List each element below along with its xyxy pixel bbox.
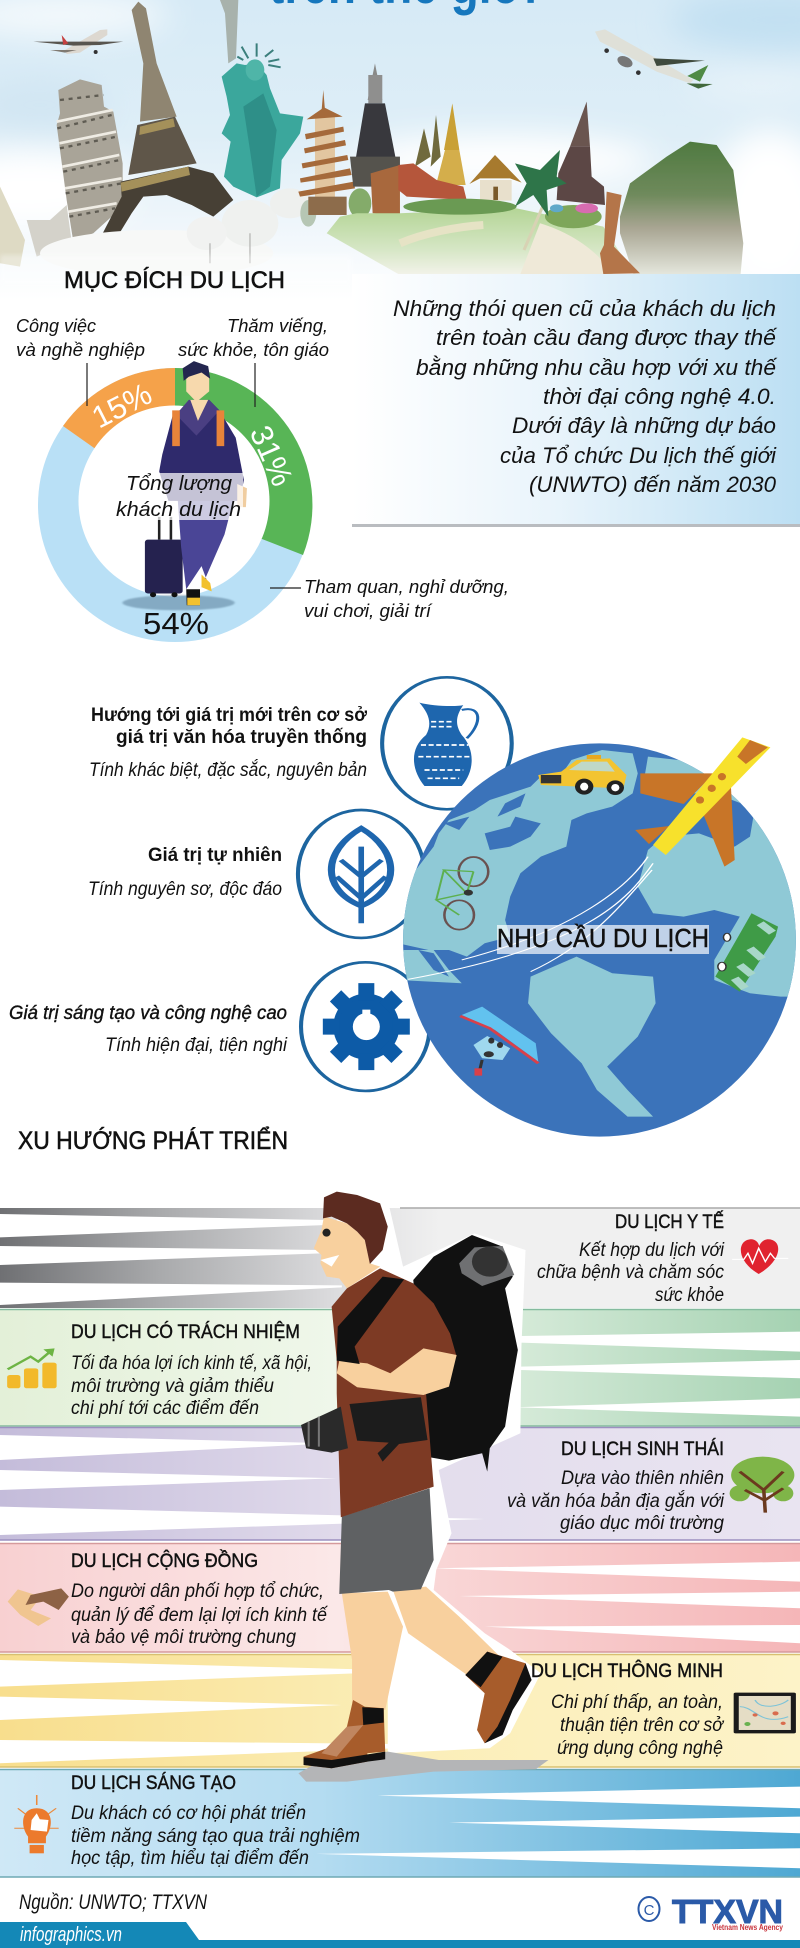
legs (342, 1587, 500, 1710)
island ground (327, 208, 633, 275)
trend: smart tourism (531, 1659, 725, 1759)
donut chart: travel purposes (16, 315, 509, 642)
trend: smart tourism: DU LỊCH THÔNG MINH (531, 1659, 723, 1682)
trend: medical tourism (537, 1210, 725, 1306)
landmark: pagoda (298, 90, 355, 215)
icon: coins and arrow (7, 1348, 57, 1388)
landmark: Statue of Liberty (220, 0, 303, 197)
value: 31%: 31% (243, 420, 300, 491)
text: traditional culture (89, 704, 367, 781)
label: sightseeing (304, 576, 509, 621)
text: natural value: Tính nguyên sơ, độc đáo (88, 878, 282, 900)
landmark: golden stupa (398, 103, 467, 200)
value: 15%: 15% (86, 376, 157, 435)
airplane right (595, 29, 713, 89)
trend: creative tourism: Du khách có cơ hội phát triển (71, 1802, 306, 1824)
label: visits: Thăm viếng, (227, 315, 328, 336)
icon: tree (730, 1457, 794, 1513)
centre label: Tổng lượng (126, 473, 232, 495)
bushes and flowers (403, 199, 602, 228)
label: sightseeing: Tham quan, nghỉ dưỡng, (304, 576, 509, 597)
front boot (304, 1700, 385, 1768)
heading: development trends: XU HƯỚNG PHÁT TRIỂN (18, 1126, 288, 1155)
trend: smart tourism: thuận tiện trên cơ sở (560, 1714, 725, 1736)
panel: intro text: bằng những nhu cầu hợp với xu thế (416, 355, 777, 380)
panel: intro text: của Tổ chức Du lịch thế giới (500, 443, 777, 468)
hero: sky and world landmarks (0, 0, 800, 300)
landmark: old town left (0, 187, 72, 267)
label: work: và nghề nghiệp (16, 339, 145, 360)
trend: responsible tourism: chi phí tới các điểm đến (71, 1397, 259, 1419)
palm tree (515, 150, 567, 250)
limestone island (620, 142, 743, 274)
icon: map tablet (734, 1693, 796, 1733)
shirt (332, 1268, 457, 1517)
text: traditional culture: Hướng tới giá trị mới trên cơ sở (91, 704, 367, 726)
trend: creative tourism: tiềm năng sáng tạo qua trải nghiệm (71, 1825, 360, 1847)
centre label (116, 473, 243, 521)
trend: responsible tourism (71, 1320, 312, 1419)
panel: intro text: thời đại công nghệ 4.0. (543, 384, 776, 409)
text: creativity value: Tính hiện đại, tiện nghi (105, 1034, 288, 1056)
text: traditional culture: giá trị văn hóa truyền thống (116, 726, 367, 748)
strap (337, 1277, 404, 1364)
sleeping roll (459, 1246, 514, 1286)
trend: eco-tourism: Dựa vào thiên nhiên (561, 1467, 724, 1489)
icon: heart (732, 1239, 788, 1274)
logo: TTXVN: C (644, 1902, 655, 1919)
logo: TTXVN: Vietnam News Agency (712, 1923, 783, 1932)
long-tail boat (600, 192, 640, 274)
label: work: Công việc (16, 315, 97, 336)
arm (337, 1348, 457, 1395)
landmark: small stupas (415, 115, 441, 167)
trend: eco-tourism: DU LỊCH SINH THÁI (561, 1437, 724, 1460)
trend: community tourism (71, 1548, 328, 1648)
landmark: leaning tower (57, 79, 123, 242)
text: natural value (88, 844, 282, 900)
trend: medical tourism: DU LỊCH Y TẾ (615, 1210, 724, 1233)
trend: smart tourism: Chi phí thấp, an toàn, (551, 1691, 723, 1713)
panel: intro text: Dưới đây là những dự báo (512, 413, 776, 438)
trend: community tourism: và bảo vệ môi trường chung (71, 1626, 296, 1648)
text: natural value: Giá trị tự nhiên (148, 844, 282, 866)
striped bands (0, 1208, 800, 1877)
vehicle: taxi (538, 755, 627, 795)
trend: eco-tourism (507, 1437, 725, 1534)
white halo (337, 1190, 541, 1753)
label: visits: sức khỏe, tôn giáo (178, 339, 329, 360)
trend: responsible tourism: Tối đa hóa lợi ích kinh tế, xã hội, (71, 1352, 312, 1374)
label: work (16, 315, 145, 360)
trend: responsible tourism: DU LỊCH CÓ TRÁCH NHIỆM (71, 1320, 300, 1343)
vehicle: bicycle (436, 857, 488, 930)
trend: creative tourism (71, 1771, 360, 1869)
back boot (465, 1652, 532, 1743)
backpack (413, 1235, 518, 1472)
icon circle: leaf (298, 810, 424, 938)
trend: eco-tourism: và văn hóa bản địa gắn với (507, 1489, 725, 1512)
head (314, 1192, 388, 1288)
landmark: distant tower (557, 102, 605, 205)
footer bar (0, 1922, 800, 1948)
icon: light bulb (14, 1795, 59, 1853)
text: traditional culture: Tính khác biệt, đặc sắc, nguyên bản (89, 758, 367, 781)
vehicle: ship (460, 1007, 538, 1076)
trend: community tourism: DU LỊCH CỘNG ĐỒNG (71, 1548, 258, 1572)
waist bag (349, 1397, 428, 1462)
landmark: Thai roof (469, 155, 522, 201)
trend: medical tourism: Kết hợp du lịch với (579, 1239, 725, 1261)
bushes (349, 188, 371, 218)
icon circle: gear (301, 962, 430, 1091)
panel: intro text: trên toàn cầu đang được thay thế (436, 325, 778, 350)
text: creativity value (9, 1002, 288, 1056)
ground shadow (298, 1752, 548, 1782)
shorts (339, 1488, 434, 1594)
traveller figure (122, 361, 247, 610)
demand section (298, 677, 800, 1137)
panel: intro text: (UNWTO) đến năm 2030 (529, 472, 776, 497)
vehicle: airplane (635, 737, 770, 867)
camera (301, 1407, 348, 1453)
globe (398, 743, 800, 1137)
label: sightseeing: vui chơi, giải trí (304, 600, 433, 621)
trend: medical tourism: chữa bệnh và chăm sóc (537, 1261, 724, 1283)
centre label: khách du lịch (116, 499, 241, 521)
trend: community tourism: quản lý để đem lại lợi ích kinh tế (71, 1604, 328, 1626)
trend: responsible tourism: môi trường và giảm thiểu (71, 1375, 274, 1397)
trend: community tourism: Do người dân phối hợp tổ chức, (71, 1580, 324, 1602)
trend: creative tourism: học tập, tìm hiểu tại điểm đến (71, 1847, 309, 1869)
vehicle: bus (715, 913, 778, 992)
trend: smart tourism: ứng dụng công nghệ (557, 1737, 723, 1759)
label: visits (178, 315, 329, 360)
text: creativity value: Giá trị sáng tạo và công nghệ cao (9, 1002, 287, 1024)
leader lines (87, 363, 301, 588)
flight trails (408, 857, 653, 979)
trend: creative tourism: DU LỊCH SÁNG TẠO (71, 1771, 236, 1794)
trend: eco-tourism: giáo dục môi trường (560, 1512, 724, 1534)
landmark: Eiffel tower (97, 2, 233, 245)
globe label: NHU CẦU DU LỊCH (497, 923, 709, 953)
panel: intro text (352, 274, 800, 527)
hiker figure (298, 1190, 548, 1782)
footer bar: infographics.vn (20, 1924, 122, 1946)
white trees (40, 188, 316, 277)
donut segment: visits 31% (175, 368, 312, 555)
icon: handshake (8, 1588, 69, 1626)
trend: medical tourism: sức khỏe (655, 1284, 724, 1306)
heading: travel purposes: MỤC ĐÍCH DU LỊCH (64, 267, 285, 294)
icon circle: jug (382, 677, 512, 809)
value: 54%: 54% (143, 606, 209, 641)
source: Nguồn: UNWTO; TTXVN (19, 1891, 208, 1914)
panel: intro text: Những thói quen cũ của khách du lịch (393, 296, 776, 321)
logo: TTXVN: TTXVN (672, 1893, 783, 1930)
airplane left (33, 29, 123, 54)
donut segment: work 15% (63, 368, 175, 505)
landmark: prang temple (350, 63, 400, 215)
